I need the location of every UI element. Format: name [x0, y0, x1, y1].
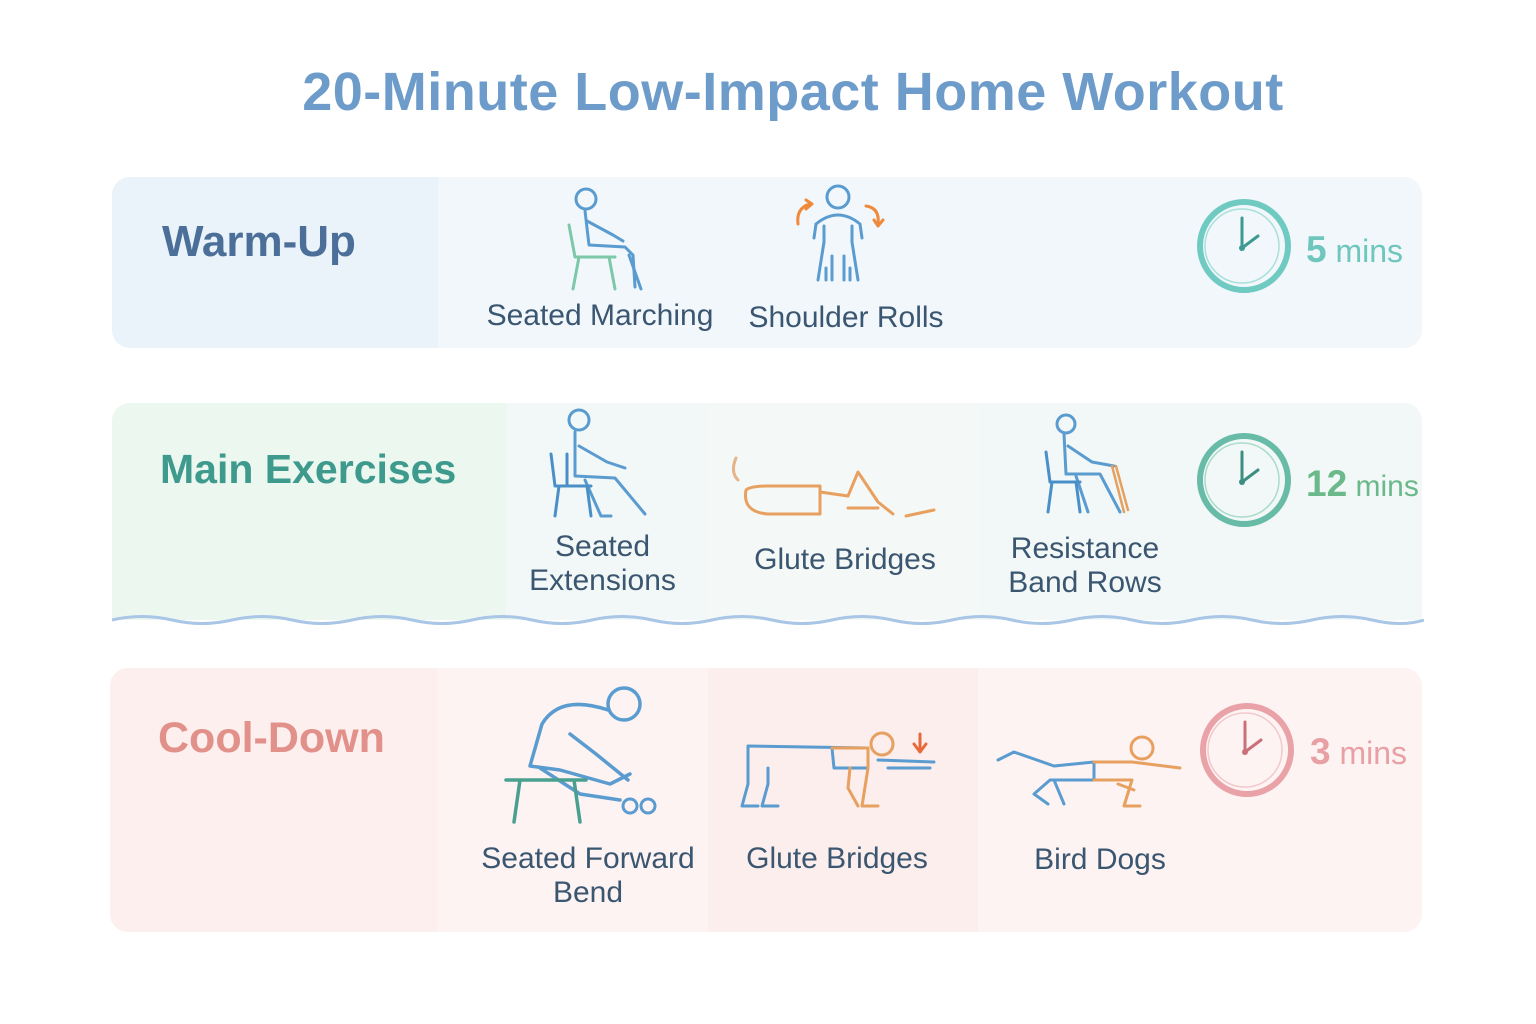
icon: shoulder rolls	[796, 184, 885, 282]
panel: cool-down	[110, 668, 1422, 932]
label: seated extensions: Seated	[555, 530, 650, 563]
duration: 5 mins: 5 mins	[1306, 229, 1403, 270]
panel: warm-up	[112, 177, 1422, 348]
label: seated forward bend	[481, 842, 695, 909]
duration: 12 mins: 12 mins	[1306, 463, 1419, 504]
heading: cool-down: Cool-Down	[158, 714, 385, 762]
label: seated extensions: Extensions	[529, 564, 676, 597]
label: glute bridges (cool-down): Glute Bridges	[746, 842, 928, 875]
icon: clock 12	[1197, 433, 1291, 527]
label: glute bridges: Glute Bridges	[754, 543, 936, 576]
wave divider	[112, 615, 1424, 625]
heading: warm-up: Warm-Up	[162, 217, 356, 266]
label: shoulder rolls: Shoulder Rolls	[748, 301, 944, 334]
icon: glute bridges (cool-down)	[740, 732, 936, 808]
label: seated extensions	[529, 530, 676, 597]
icon: seated extensions	[550, 408, 647, 518]
icon: seated forward bend	[504, 686, 656, 824]
icon: clock 3	[1200, 703, 1294, 797]
label: resistance band rows: Resistance	[1011, 532, 1159, 565]
label: seated marching: Seated Marching	[487, 299, 713, 332]
label: seated forward bend: Seated Forward	[481, 842, 695, 875]
label: bird dogs: Bird Dogs	[1034, 843, 1166, 876]
label: seated forward bend: Bend	[553, 876, 623, 909]
icon: seated marching	[568, 188, 642, 290]
title: 20-Minute Low-Impact Home Workout	[302, 62, 1284, 122]
label: resistance band rows: Band Rows	[1008, 566, 1162, 599]
heading: main exercises: Main Exercises	[160, 446, 456, 492]
label: resistance band rows	[1008, 532, 1162, 599]
icon: glute bridges	[732, 456, 936, 518]
panel: main exercises	[112, 403, 1422, 620]
icon: bird dogs	[996, 736, 1182, 808]
icon: resistance band rows	[1044, 414, 1130, 514]
icon: clock 5	[1197, 199, 1291, 293]
duration: 3 mins: 3 mins	[1310, 731, 1407, 772]
